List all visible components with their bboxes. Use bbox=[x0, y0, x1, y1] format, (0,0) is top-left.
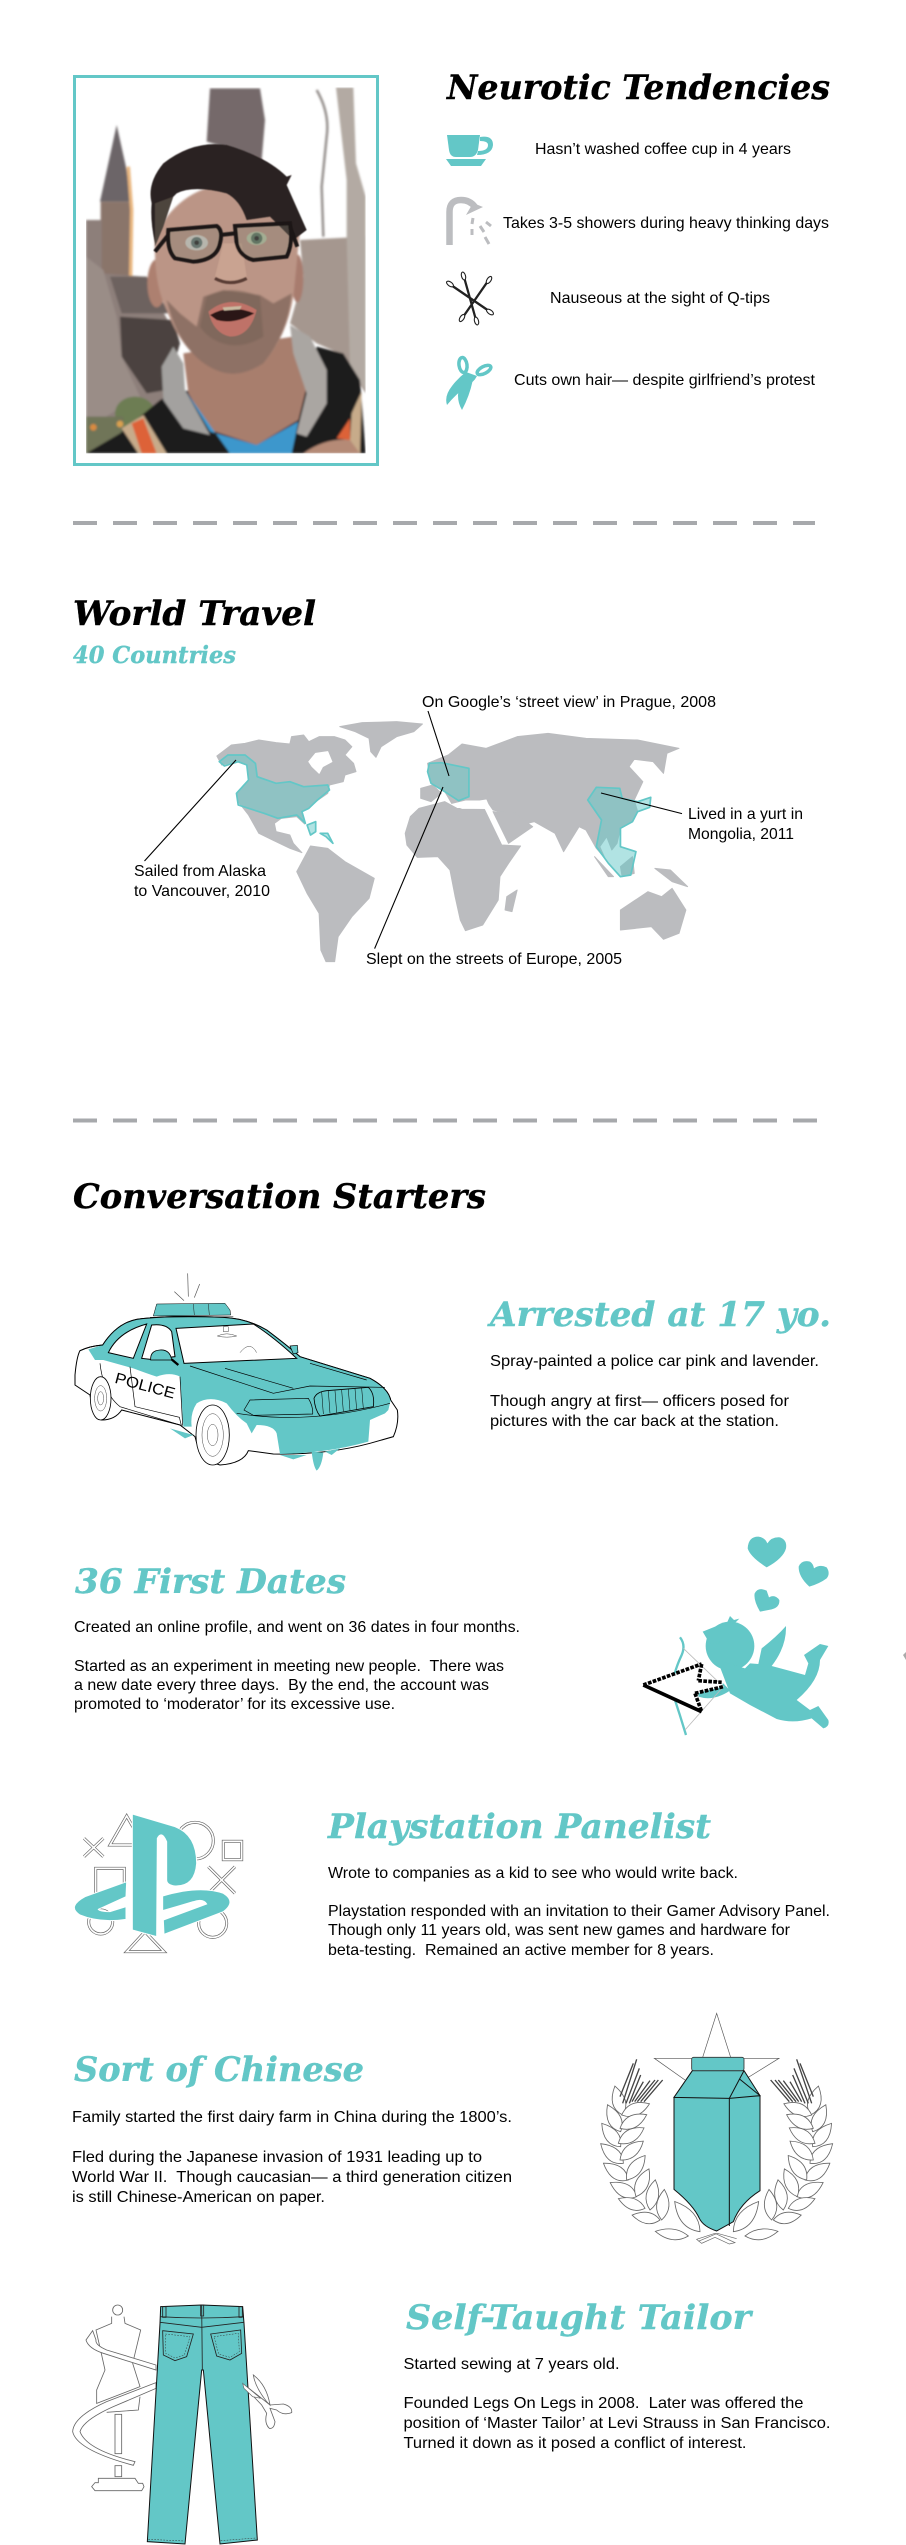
text: arrested description: Though angry at first— officers posed for bbox=[490, 1393, 789, 1410]
text: first dates description: Created an online profile, and went on 36 dates in four months. bbox=[74, 1619, 520, 1636]
text: Q-tips: Nauseous at the sight of Q-tips bbox=[550, 290, 770, 307]
text: chinese description: Family started the first dairy farm in China during the 1800’s. bbox=[72, 2109, 512, 2126]
callout: Prague: On Google’s ‘street view’ in Prague, 2008 bbox=[422, 694, 716, 711]
chart: world map bbox=[144, 711, 688, 962]
text: tailor description: position of ‘Master Tailor’ at Levi Strauss in San Francisco. bbox=[404, 2415, 830, 2432]
illustration: milk carton with star and wreath bbox=[596, 2013, 837, 2244]
text: arrested description: Spray-painted a police car pink and lavender. bbox=[490, 1353, 819, 1370]
callout: Alaska: Sailed from Alaska bbox=[134, 863, 266, 880]
text: playstation description: Though only 11 years old, was sent new games and hardware for bbox=[328, 1922, 790, 1939]
heading: World Travel: World Travel bbox=[73, 594, 316, 634]
text: first dates description: a new date every three days. By the end, the account was bbox=[74, 1677, 489, 1694]
icon: scissors bbox=[446, 357, 492, 410]
text: tailor description bbox=[404, 2356, 830, 2452]
callout: Alaska bbox=[134, 863, 270, 900]
text: playstation description: Wrote to companies as a kid to see who would write back. bbox=[328, 1865, 738, 1882]
text: tailor description: Started sewing at 7 years old. bbox=[404, 2356, 620, 2373]
heading: Conversation Starters: Conversation Starters bbox=[73, 1177, 486, 1217]
heading: Self-Taught Tailor: Self-Taught Tailor bbox=[406, 2298, 753, 2338]
heading: 36 First Dates: 36 First Dates bbox=[75, 1562, 346, 1602]
icon: coffee cup bbox=[446, 135, 493, 166]
divider bbox=[73, 1118, 817, 1122]
icon: crossed Q-tips bbox=[446, 272, 494, 325]
callout: Mongolia: Lived in a yurt in bbox=[688, 806, 803, 823]
text: tailor description: Turned it down as it posed a conflict of interest. bbox=[404, 2435, 746, 2452]
illustration: jeans with mannequin, tape and scissors bbox=[73, 2305, 292, 2544]
text: playstation description bbox=[328, 1865, 830, 1959]
text: chinese description: Fled during the Japanese invasion of 1931 leading up to bbox=[72, 2149, 482, 2166]
icon: shower bbox=[450, 200, 491, 245]
text: arrested description: pictures with the car back at the station. bbox=[490, 1413, 779, 1430]
text: arrested description bbox=[490, 1353, 819, 1430]
heading: Neurotic Tendencies: Neurotic Tendencies bbox=[446, 68, 830, 108]
illustration: cupid with cursor arrow bbox=[643, 1537, 829, 1735]
text: chinese description bbox=[72, 2109, 512, 2206]
text: first dates description bbox=[74, 1619, 520, 1713]
illustration: spray-painted police car: POLICE bbox=[113, 1370, 177, 1402]
text: coffee cup: Hasn’t washed coffee cup in 4 years bbox=[535, 141, 791, 158]
panel: portrait photo with teal frame bbox=[74, 76, 378, 464]
text: playstation description: Playstation responded with an invitation to their Gamer Advisory Panel. bbox=[328, 1903, 830, 1920]
illustration: spray-painted police car bbox=[75, 1273, 398, 1471]
text: shower: Takes 3-5 showers during heavy thinking days bbox=[503, 215, 829, 232]
text: tailor description: Founded Legs On Legs in 2008. Later was offered the bbox=[404, 2395, 804, 2412]
callout: Alaska: to Vancouver, 2010 bbox=[134, 883, 270, 900]
text: playstation description: beta-testing. Remained an active member for 8 years. bbox=[328, 1942, 714, 1959]
callout: Mongolia: Mongolia, 2011 bbox=[688, 826, 794, 843]
subheading: 40 Countries: 40 Countries bbox=[73, 642, 236, 669]
heading: Sort of Chinese: Sort of Chinese bbox=[74, 2050, 364, 2090]
text: first dates description: promoted to ‘moderator’ for its excessive use. bbox=[74, 1696, 395, 1713]
text: chinese description: is still Chinese-American on paper. bbox=[72, 2189, 325, 2206]
decorative mark at right edge bbox=[903, 1652, 906, 1660]
heading: Playstation Panelist: Playstation Panelist bbox=[327, 1807, 711, 1847]
callout: Mongolia bbox=[688, 806, 803, 843]
text: first dates description: Started as an experiment in meeting new people. There was bbox=[74, 1658, 504, 1675]
heading: Arrested at 17 yo.: Arrested at 17 yo. bbox=[487, 1295, 831, 1335]
text: scissors: Cuts own hair— despite girlfriend’s protest bbox=[514, 372, 816, 389]
text: chinese description: World War II. Though caucasian— a third generation citizen bbox=[72, 2169, 512, 2186]
callout: Europe: Slept on the streets of Europe, 2005 bbox=[366, 951, 622, 968]
divider bbox=[73, 521, 815, 525]
illustration: PlayStation logo with button shapes bbox=[74, 1814, 242, 1952]
